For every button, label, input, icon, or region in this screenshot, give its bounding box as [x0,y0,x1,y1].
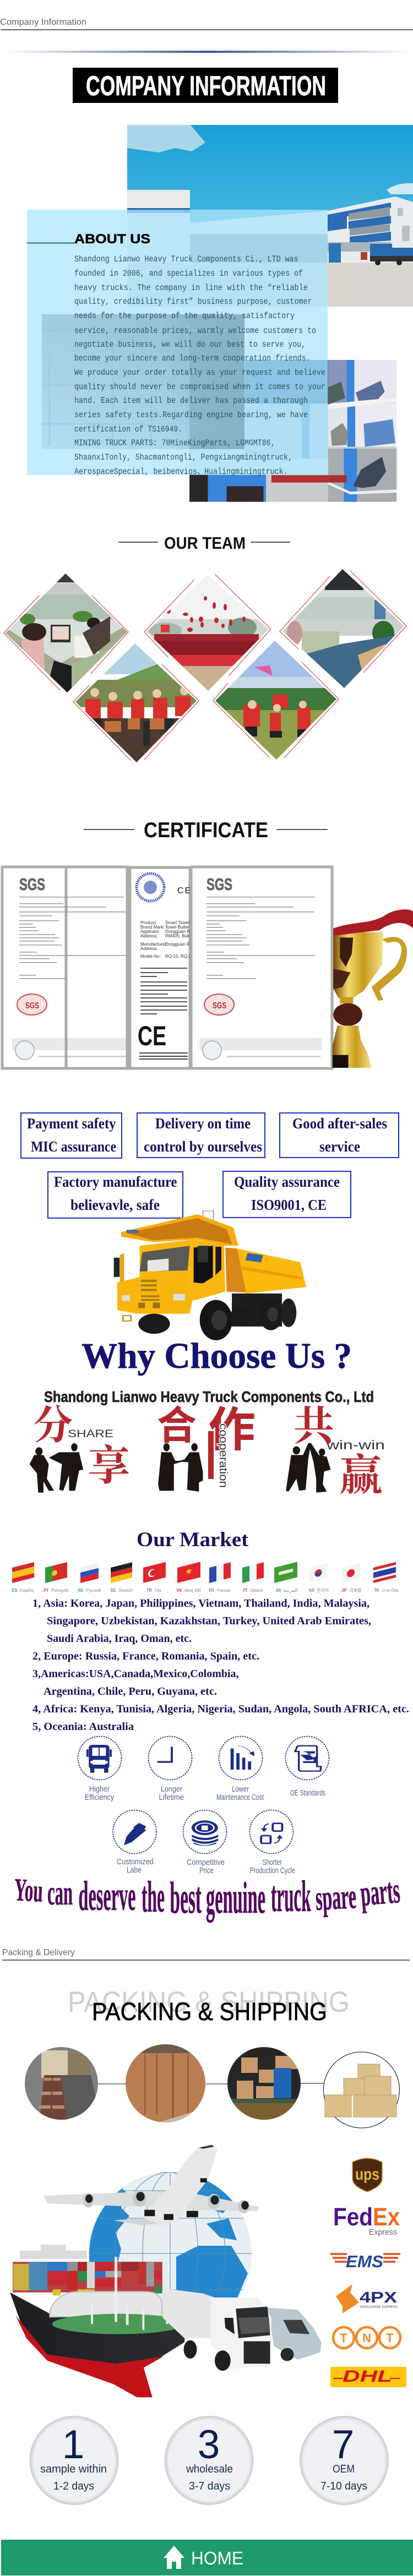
flag: Russia [80,1563,99,1583]
logo: 4PX [336,2284,398,2313]
language labels: IT [243,1588,248,1593]
logo: TNT: T [386,2331,394,2345]
icon labels: Customized [117,1857,153,1866]
delivery time circle: sample: 1-2 days [53,2480,94,2492]
logo: FedEx Express: Fed [333,2203,373,2231]
icon labels: Production Cycle [250,1866,295,1875]
icon: pen [124,1823,146,1846]
language labels: RU [78,1588,84,1593]
box: payment safety: Payment safety [27,1115,116,1132]
icon labels: Price [199,1866,214,1875]
text block: about paragraph: series safety tests.Regarding engine bearing, we have [74,410,308,420]
text block: market list: Singapore, Uzbekistan, Kazakhstan, Turkey, United Arab Emirates, [47,1615,371,1627]
text block: about paragraph: needs for the purpose of the quality, satisfactory [74,311,295,321]
delivery time circle: OEM [300,2416,389,2505]
text block: about paragraph: founded in 2006, and specializes in various types of [74,269,303,279]
logo: EMS [330,2252,400,2271]
box: quality assurance: Quality assurance [234,1174,340,1190]
home bar [1,2540,413,2575]
certificate: SGS left [2,867,127,1068]
box: factory manufacture: Factory manufacture [54,1174,177,1190]
photo: team diamond field [212,638,341,765]
illustration: globe [89,2172,252,2303]
title: packing and shipping: PACKING & SHIPPING [68,1986,350,2018]
text block: market list: 1, Asia: Korea, Japan, Philippines, Vietnam, Thailand, India, Malaysia, [32,1597,369,1609]
logo: DHL [330,2367,406,2387]
logo: UPS: ups [355,2165,379,2184]
box: payment safety: MIC assurance [31,1138,116,1155]
wave headline: you can deserve the best genuine truck spare parts: deserve [78,1873,135,1919]
language labels: VN [176,1588,182,1593]
panel: about us [27,210,328,477]
text block: about paragraph: certification of TS16949. [74,424,182,434]
certificate: CE middle [130,867,199,1068]
photo: shelves with headlights [189,360,396,502]
text block: about paragraph: We produce your order totally as your request and believe [74,368,325,378]
language labels: TH [374,1588,379,1593]
certificate: CE middle: Dongguan Rangi [165,929,198,934]
language labels: JP [341,1588,347,1593]
graphic: cooperation: cooperation [217,1423,229,1488]
certificate: CE middle: Smart Towel Ste [165,920,198,925]
delivery time circle: sample [30,2416,119,2505]
language labels: 한국어 [317,1587,329,1593]
logo: FedEx Express: Ex [373,2203,400,2231]
certificate: CE middle: CE [177,886,192,896]
text block: market list: Saudi Arabia, Iraq, Oman, etc. [47,1633,192,1645]
icon labels: Maintenance Cost [216,1793,264,1802]
photo: team diamond office right [278,567,410,694]
language labels: Español [20,1588,34,1593]
panel: benefits boxes [21,1113,399,1218]
delivery time circle: OEM: 7-10 days [320,2480,367,2492]
box: payment safety [21,1113,122,1158]
graphic: cooperation: 作 [208,1404,256,1456]
box: factory manufacture: believavle, safe [70,1197,160,1213]
section label: Company Information: Company Information [0,18,86,27]
certificate: SGS right: SGS [206,875,232,894]
language labels: 日本語 [350,1587,361,1593]
text block: about paragraph: heavy trucks. The company in line with the “reliable [74,283,308,293]
icon labels: Longer [161,1784,182,1794]
certificate: CE middle: RQ-10, RQ-20, R [165,954,199,959]
language labels: AR [276,1588,281,1593]
logo: UPS [352,2158,382,2192]
icon labels: OE Standards [290,1788,325,1798]
text block: market list: 5, Oceania: Australia [32,1721,134,1733]
language labels [12,1587,399,1593]
certificate: SGS left: SGS [25,1001,39,1011]
graphic: share: 分 [33,1404,73,1448]
graphic: share: SHARE [68,1428,113,1440]
graphic: win-win: 赢 [339,1451,382,1499]
text block: market list: 4, Africa: Kenya, Tunisia, Algeria, Nigeria, Sudan, Angola, South AFRICA, etc. [32,1703,409,1715]
certificate: SGS left: SGS [19,875,45,894]
logo: 4PX: 4PX [360,2289,397,2306]
box: factory manufacture [48,1172,183,1218]
title: packing and shipping: PACKING & SHIPPING [92,1998,327,2026]
certificate: CE middle: CE [138,1020,166,1051]
certificate: CE middle: Model No: [140,954,160,959]
icon: clock hands [157,1747,173,1763]
flag: Saudi Arabia [274,1562,297,1583]
box: quality assurance: ISO9001, CE [251,1197,327,1213]
flag: Italy [242,1562,264,1583]
icon: gold trophy [333,909,413,1068]
box: good after-sales service: service [319,1138,360,1155]
logo: DHL: DHL [343,2367,392,2386]
icon grid: product advantages [78,1736,329,1875]
logo: TNT: N [362,2331,371,2345]
dotted circles [78,1736,329,1854]
graphic: win-win [286,1404,385,1499]
label: home: HOME [191,2548,243,2568]
icon: two business silhouettes [30,1443,83,1493]
icon labels: Higher [89,1784,110,1794]
graphic: win-win: 共 [294,1404,335,1449]
language labels: tiếng Việt [184,1588,202,1593]
flag: Spain [12,1562,34,1583]
logo: TNT [333,2327,400,2348]
photo: container with crates [25,2047,98,2120]
flag: South Korea [309,1563,328,1583]
text block: about paragraph: service, reasonable prices, warmly welcome customers to [74,326,316,336]
text block: market list: Argentina, Chile, Peru, Guyana, etc. [44,1685,217,1698]
wave headline: you can deserve the best genuine truck spare parts: genuine [206,1873,265,1923]
graphic: cooperation [157,1404,256,1492]
flags row with languages [12,1562,399,1593]
illustration: white truck and van [163,2288,322,2371]
heading: our team: OUR TEAM [164,533,246,553]
text block: about paragraph: quality should never be compromised when it comes to your [74,382,325,392]
certificate: CE middle: Manufacturer: [140,942,167,947]
box: quality assurance [223,1171,351,1218]
heading: about us: ABOUT US [74,232,150,247]
icon labels: Shorter [262,1858,282,1867]
flag: Thailand [373,1562,396,1583]
photo: stack of wooden crates [324,2052,400,2128]
icon: high-five silhouettes [286,1443,331,1493]
language labels: DE [111,1588,116,1593]
flag: Portugal [45,1562,67,1583]
delivery time circle: OEM: 7 [332,2422,354,2467]
icon labels: Labe [127,1865,142,1875]
wave headline: you can deserve the best genuine truck spare parts: truck [271,1873,311,1921]
line: about us rule [27,242,74,243]
text block: market list: 3,Americas:USA,Canada,Mexico,Colombia, [32,1668,239,1680]
delivery time circle: wholesale: wholesale [186,2463,233,2475]
logo: TNT: T [340,2331,347,2345]
icon labels: Lifetime [159,1793,184,1802]
text block: about paragraph [74,254,325,477]
box: good after-sales service: Good after-sales [292,1115,387,1132]
text block: about paragraph: Shandong Lianwo Heavy Truck Components Ci., LTD was [74,254,298,264]
text block: about paragraph: MINING TRUCK PARTS: 70MineKingParts, LGMGMT86, [74,438,275,448]
language labels: ภาษาไทย [382,1588,399,1593]
delivery time circle: wholesale: 3 [198,2422,220,2467]
language labels: Deutsch [119,1588,133,1593]
graphic: win-win: win-win [326,1438,385,1452]
certificate: CE middle: Towel Butler [165,925,189,930]
wave headline: you can deserve the best genuine truck spare parts: best [170,1873,202,1923]
wave headline: you can deserve the best genuine truck spare parts [13,1870,401,1923]
delivery time circle: sample: sample within [40,2463,107,2475]
photo: warehouse racks [42,314,244,449]
text block: about paragraph: hand. Each item will be deliver has passed a thorough [74,396,308,406]
language labels: FR [209,1588,214,1593]
wave headline: you can deserve the best genuine truck spare parts: spare [314,1876,357,1918]
delivery time circle: wholesale [164,2416,253,2505]
text block: about paragraph: negotiate business, we will do our best to serve you, [74,340,306,350]
wave headline: you can deserve the best genuine truck spare parts: can [47,1873,73,1912]
delivery time circle: wholesale: 3-7 days [189,2480,230,2492]
certificates row [2,867,332,1068]
wave headline: you can deserve the best genuine truck spare parts: You [13,1871,44,1909]
icon: cycle [261,1824,282,1843]
language labels: Русский [86,1588,101,1593]
flag: Turkey [143,1562,166,1583]
text block: about paragraph: quality, credibility first” business purpose, customer [74,297,312,307]
language labels: Français [217,1588,231,1593]
heading: why choose us: Why Choose Us ? [81,1336,352,1376]
heading: our market: Our Market [137,1529,249,1551]
icon labels [85,1784,325,1875]
certificate: CE middle: Address: [140,934,158,938]
language labels: ES [12,1588,18,1593]
certificate: CE middle: Brand Mark: [140,925,165,930]
icon: handshake silhouettes [158,1443,203,1492]
box: good after-sales service [280,1113,399,1158]
box: delivery on time [137,1113,265,1158]
language labels: Türk [154,1588,162,1593]
icon: house [164,2546,184,2569]
certificate: CE middle: Applicant: [140,929,160,934]
title: COMPANY INFORMATION [73,68,338,103]
language labels: PT [44,1588,49,1593]
photo: factory building under sky [127,125,413,307]
text block: about paragraph: AerospaceSpecial, beibenvios、Hualingminingtruck. [74,467,287,477]
icon labels: Lower [232,1784,249,1794]
logo: EMS: EMS [346,2252,383,2271]
section label: Packing & Delivery: Packing & Delivery [2,1948,75,1957]
icons drawn in zoom coordinates [86,1745,321,1846]
graphic: share [30,1404,130,1493]
logo: 4PX: WORLDWIDE EXPRESS [360,2306,398,2309]
graphic: share: 享 [88,1443,130,1489]
box: delivery on time: control by ourselves [144,1138,262,1155]
flag: Vietnam [177,1562,200,1583]
text block: market list [32,1597,409,1733]
icon labels: Efficiency [85,1793,114,1802]
language labels: Português [51,1588,69,1593]
certificate: CE middle: Dongguan Rangi [165,942,198,947]
illustration: yellow mining dump truck [114,1211,306,1340]
heading: certificate: CERTIFICATE [144,818,268,842]
flag: Germany [111,1562,132,1583]
text block: about paragraph: ShaanxiTonly, Shacmantongli, Pengxiangminingtruck, [74,452,292,462]
language labels: العربية [284,1588,298,1593]
photo: team diamond office left [3,574,129,692]
language labels: Italiano [251,1588,263,1593]
illustration: airplane [43,2144,259,2226]
certificate: SGS right [191,867,332,1068]
box: delivery on time: Delivery on time [155,1115,251,1132]
photo: loaded truck [227,2047,301,2120]
certificate: CE middle: Product: [140,920,157,925]
delivery time circle: OEM: OEM [333,2463,355,2475]
delivery time circle: sample: 1 [62,2422,84,2467]
photo: team diamond cycling [72,641,201,765]
flag: Japan [342,1563,360,1583]
illustration: cargo ship [10,2245,186,2397]
photo: team diamond petals [140,572,273,694]
flag: France [209,1562,231,1583]
logo: FedEx Express: Express [369,2228,397,2237]
wave headline: you can deserve the best genuine truck spare parts: the [142,1873,165,1922]
graphic: cooperation: 合 [157,1404,197,1448]
packing photos with connectors [25,2044,400,2128]
icon: bus [86,1745,112,1773]
text block: market list: 2, Europe: Russia, France, Romania, Spain, etc. [32,1650,259,1662]
certificate: CE middle: Address: [140,946,158,951]
photo: plywood crate [126,2044,205,2122]
icon: coin stack [192,1820,218,1846]
icon: document check [295,1746,321,1771]
icon: falling bars [231,1746,254,1770]
language labels: KR [309,1588,314,1593]
icon labels: Competitive [187,1858,225,1867]
language labels: TR [146,1588,152,1593]
text block: about paragraph: become your sincere and long-term cooperation friends. [74,353,311,363]
certificate: CE middle: RM405, Building [165,934,198,938]
certificate: SGS right: SGS [213,1001,226,1011]
logo: FedEx Express [333,2203,400,2237]
